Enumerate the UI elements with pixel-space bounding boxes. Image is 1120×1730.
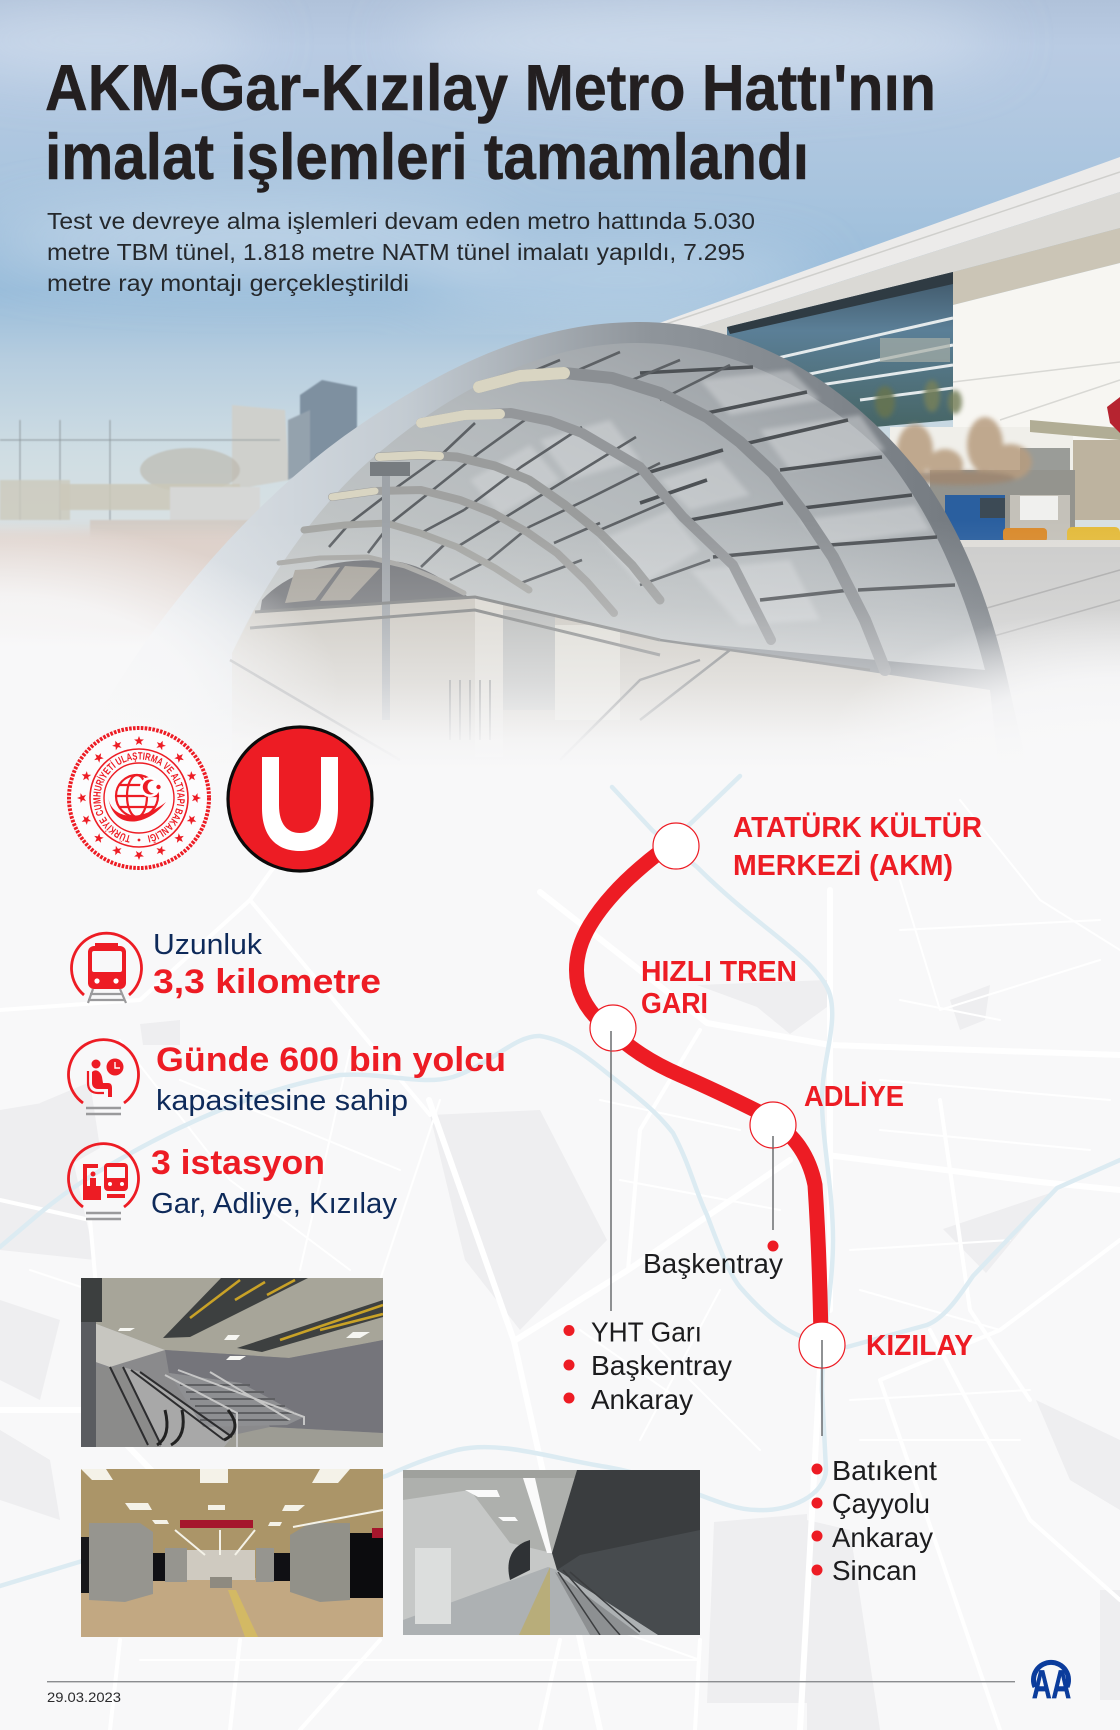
dome lower concrete: [232, 598, 990, 736]
icon: waiting passenger: [68, 1040, 138, 1114]
stat: capacity: Günde 600 bin yolcu: [156, 1041, 506, 1079]
subtitle text block: metre TBM tünel, 1.818 metre NATM tünel imalatı yapıldı, 7.295: [47, 239, 745, 265]
metro route map: [564, 811, 982, 1586]
logo: Anadolu Agency: AA: [1032, 1663, 1071, 1707]
skyline: [0, 380, 357, 540]
stat: capacity: kapasitesine sahip: [156, 1085, 408, 1117]
subtitle text block: metre ray montajı gerçekleştirildi: [47, 270, 409, 296]
building: [660, 157, 1120, 678]
station: AKM: [653, 811, 982, 882]
connections: Gar: Ankaray: [591, 1384, 693, 1415]
icon: ticket machine and train: [68, 1144, 138, 1219]
connections: Kızılay: Batıkent: [832, 1455, 937, 1486]
title: [45, 51, 936, 193]
logo: ministry seal: TÜRKİYE CUMHURİYETİ ULAŞTIRMA VE ALTYAPI BAKANLIĞI: [93, 752, 185, 844]
station: Hızlı Tren Garı: [590, 956, 797, 1051]
footer rule: [47, 1681, 1015, 1682]
connector lines: [611, 1051, 822, 1436]
stat: length: [72, 929, 381, 1003]
subtitle text block: [47, 208, 755, 296]
logo: U metro: [228, 727, 372, 871]
station: AKM: MERKEZİ (AKM): [733, 850, 953, 882]
dome ribs: [279, 373, 885, 670]
connections: Kızılay: [812, 1455, 937, 1586]
photo: station platform: [81, 1469, 383, 1637]
route line: [576, 852, 821, 1340]
icon: train: [72, 933, 142, 1003]
stat: stations: 3 istasyon: [151, 1144, 325, 1182]
connections: Adliye: Başkentray: [643, 1248, 783, 1279]
beams: [640, 367, 955, 600]
lamp post and railings: [230, 462, 870, 760]
subtitle text block: Test ve devreye alma işlemleri devam eden metro hattında 5.030: [47, 208, 755, 234]
station: Hızlı Tren Garı: HIZLI TREN: [641, 956, 797, 988]
station: Adliye: ADLİYE: [804, 1081, 904, 1113]
connections: Gar: Başkentray: [591, 1350, 732, 1381]
connections: Kızılay: Ankaray: [832, 1522, 933, 1553]
connections: Kızılay: Çayyolu: [832, 1488, 930, 1519]
station: AKM: ATATÜRK KÜLTÜR: [733, 811, 982, 844]
connections: Kızılay: Sincan: [832, 1555, 917, 1586]
title: imalat işlemleri tamamlandı: [45, 120, 809, 193]
station: Kızılay: KIZILAY: [866, 1330, 973, 1362]
stat: stations: [68, 1144, 397, 1220]
background street map: [0, 776, 1120, 1730]
ground: [0, 527, 230, 626]
logo: ministry seal: [67, 726, 211, 870]
stat: length: 3,3 kilometre: [153, 963, 381, 1001]
connections: Gar: [564, 1316, 732, 1415]
station: Kızılay: [799, 1322, 973, 1368]
stat: capacity: [68, 1040, 506, 1117]
dome glass: [232, 343, 985, 670]
title: AKM-Gar-Kızılay Metro Hattı'nın: [45, 51, 936, 124]
dome frame: [166, 322, 1010, 696]
date: 29.03.2023: [47, 1689, 121, 1705]
logo: Anadolu Agency: [1032, 1662, 1071, 1707]
hero photo: metro entrance dome: [0, 0, 1120, 910]
connections: Gar: YHT Garı: [591, 1316, 702, 1348]
fade to white: [184, 538, 1120, 770]
stat: length: Uzunluk: [153, 929, 263, 961]
station: Adliye: [750, 1081, 904, 1148]
stat: stations: Gar, Adliye, Kızılay: [151, 1188, 397, 1220]
photo: station concourse with escalators: [81, 1277, 383, 1447]
photo: tunnel: [403, 1470, 700, 1635]
station: Hızlı Tren Garı: GARI: [641, 988, 708, 1020]
